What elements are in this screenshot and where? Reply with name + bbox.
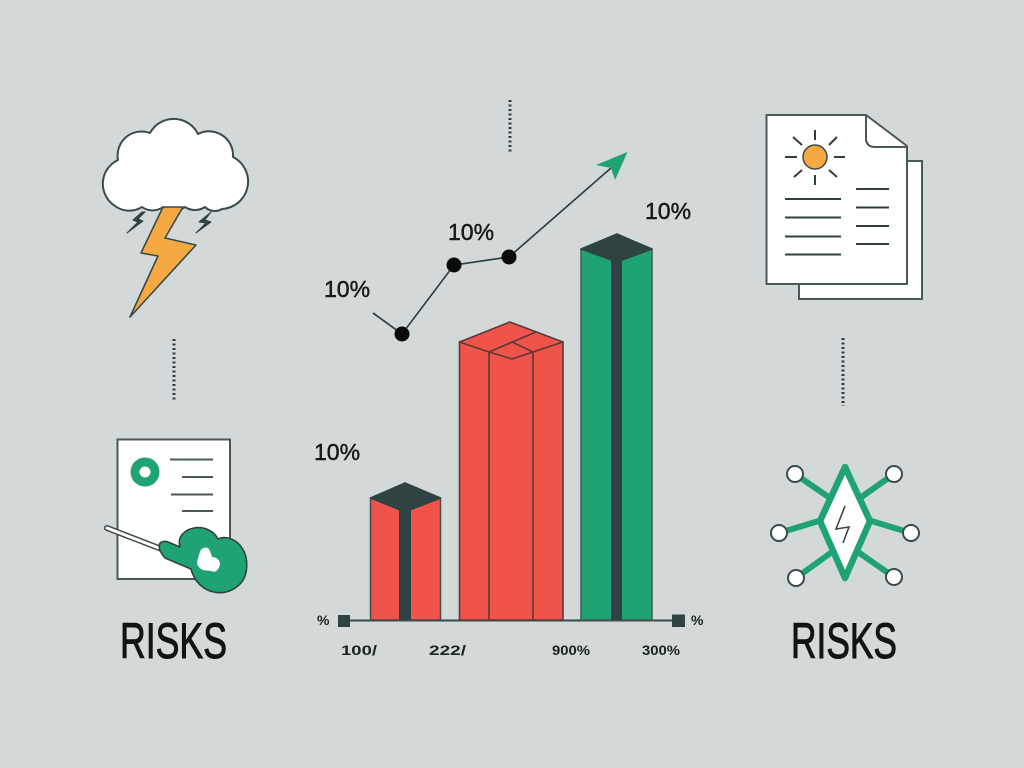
dotted connector right xyxy=(842,338,844,406)
axis labels: 100/ xyxy=(341,642,377,658)
heading: right RISKS: RISKS xyxy=(791,613,897,669)
bar: tall green xyxy=(581,234,652,620)
bar: tall red xyxy=(460,322,563,620)
icon: document with magnifier xyxy=(107,440,247,593)
dotted connector left xyxy=(172,339,176,402)
axis labels xyxy=(317,612,704,658)
axis labels: 900% xyxy=(552,642,591,658)
value labels: 10% xyxy=(645,198,691,224)
bar chart xyxy=(317,234,704,658)
value labels: 10% xyxy=(314,439,360,465)
axis labels: 222/ xyxy=(429,642,466,658)
heading: left RISKS: RISKS xyxy=(120,613,227,669)
axis labels: 300% xyxy=(642,642,681,658)
bar: short red xyxy=(370,483,440,620)
icon: network diamond xyxy=(771,466,919,586)
axis xyxy=(338,614,685,627)
icon: stacked documents with sun xyxy=(766,115,922,299)
axis labels: % xyxy=(691,612,704,628)
value labels: 10% xyxy=(448,219,494,245)
value labels xyxy=(314,198,691,465)
axis labels: % xyxy=(317,612,330,628)
arrowhead xyxy=(596,152,628,180)
value labels: 10% xyxy=(324,276,370,302)
icon: storm cloud with lightning xyxy=(103,119,248,317)
dotted connector top xyxy=(508,100,512,153)
line chart with arrow xyxy=(373,152,628,342)
